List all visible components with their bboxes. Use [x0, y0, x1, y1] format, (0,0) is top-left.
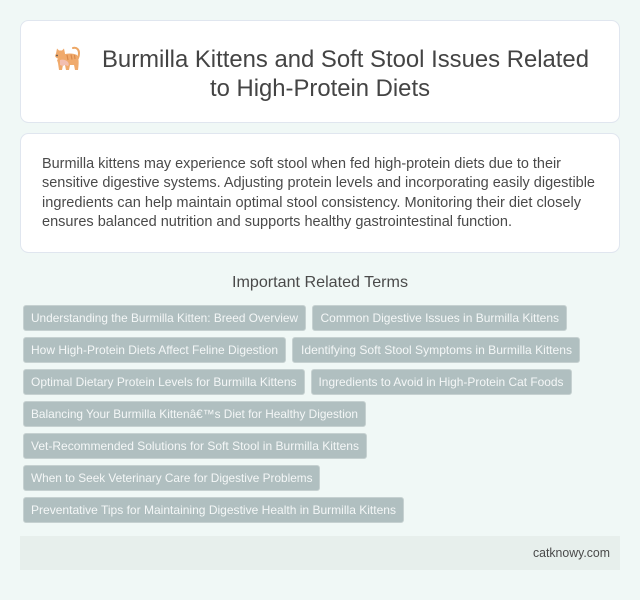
- tag: breed overview: [24, 306, 306, 330]
- title: [102, 46, 589, 102]
- text block: summary: ensures balanced nutrition and supports healthy gastrointestinal function.: [42, 214, 512, 230]
- text block: summary: sensitive digestive systems. Adjusting protein levels and incorporating easily digestible: [42, 175, 595, 191]
- text block: summary: Burmilla kittens may experience soft stool when fed high-protein diets due to their: [42, 156, 561, 172]
- tag: high-protein digestion: [24, 338, 286, 362]
- tag: balancing diet: [24, 402, 366, 426]
- tag: soft stool symptoms: Identifying Soft Stool Symptoms in Burmilla Kittens: [301, 343, 572, 357]
- title: to High-Protein Diets: [210, 75, 430, 102]
- panel: summary text card: [20, 134, 620, 252]
- tag: breed overview: Understanding the Burmilla Kitten: Breed Overview: [31, 311, 298, 325]
- heading: important related terms: Important Related Terms: [232, 274, 408, 291]
- tag: ingredients to avoid: [312, 370, 572, 394]
- footer bar: [20, 536, 620, 570]
- tag: balancing diet: Balancing Your Burmilla Kittenâ€™s Diet for Healthy Digestion: [31, 407, 358, 421]
- footer source text: catknowy.com: [533, 546, 610, 560]
- tag: preventative tips: Preventative Tips for Maintaining Digestive Health in Burmilla Kittens: [31, 503, 396, 517]
- tag: common digestive issues: [312, 306, 566, 330]
- tag: preventative tips: [24, 498, 404, 522]
- tag: soft stool symptoms: [292, 338, 580, 362]
- tag: vet-recommended solutions: [24, 434, 366, 458]
- tag: ingredients to avoid: Ingredients to Avoid in High-Protein Cat Foods: [318, 375, 564, 389]
- tag: common digestive issues: Common Digestive Issues in Burmilla Kittens: [320, 311, 559, 325]
- title: Burmilla Kittens and Soft Stool Issues Related: [102, 46, 589, 73]
- tag: optimal protein levels: [24, 370, 304, 394]
- panel: title card: [20, 20, 620, 122]
- panel: related terms tags: [24, 306, 580, 522]
- text block: summary: ingredients can help maintain optimal stool consistency. Monitoring their diet closely: [42, 195, 582, 211]
- icon: orange cat: [55, 48, 79, 70]
- tag: high-protein digestion: How High-Protein Diets Affect Feline Digestion: [31, 343, 278, 357]
- text block: summary: [42, 156, 595, 230]
- tag: vet-recommended solutions: Vet-Recommended Solutions for Soft Stool in Burmilla Kittens: [31, 439, 359, 453]
- tag: when to seek care: When to Seek Veterinary Care for Digestive Problems: [31, 471, 312, 485]
- tag: when to seek care: [24, 466, 320, 490]
- tag: optimal protein levels: Optimal Dietary Protein Levels for Burmilla Kittens: [31, 375, 296, 389]
